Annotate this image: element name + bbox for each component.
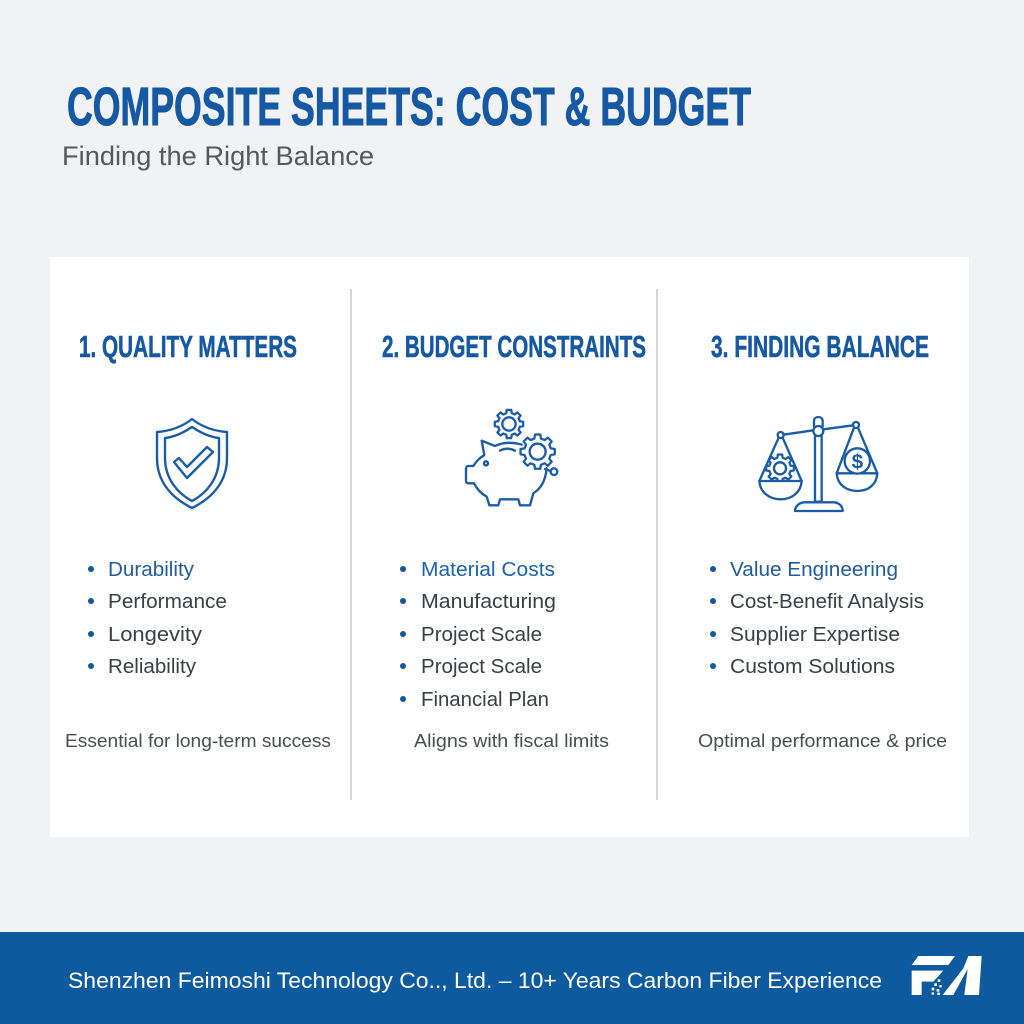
- main white panel: [50, 257, 969, 837]
- column: finding balance: [698, 329, 947, 751]
- caption: budget: Aligns with fiscal limits: [414, 730, 609, 751]
- icon: balance scale with gear and dollar: $: [852, 450, 864, 473]
- heading: budget constraints: 2. BUDGET CONSTRAINTS: [382, 329, 646, 364]
- column: quality matters: [65, 329, 331, 751]
- bullet list: budget: Material Costs: [421, 559, 555, 581]
- bullet list: budget: Financial Plan: [421, 689, 549, 711]
- bullet list: balance: [710, 559, 924, 678]
- caption: balance: Optimal performance & price: [698, 730, 947, 751]
- subtitle: Finding the Right Balance: [62, 141, 374, 171]
- icon: balance scale with gear and dollar: [759, 417, 877, 511]
- bullet list: balance: Supplier Expertise: [730, 624, 900, 646]
- icon: shield with check mark: [157, 419, 227, 508]
- footer band: [0, 932, 1024, 1024]
- caption: quality: Essential for long-term success: [65, 730, 331, 751]
- bullet list: budget: [400, 559, 556, 711]
- heading: finding balance: 3. FINDING BALANCE: [711, 329, 929, 364]
- icon: piggy bank with gears: [466, 410, 557, 505]
- bullet list: quality: Durability: [108, 559, 194, 581]
- logo: FM mark: [912, 956, 982, 995]
- bullet list: budget: Project Scale: [421, 656, 542, 678]
- bullet list: quality: [88, 559, 227, 678]
- bullet list: balance: Custom Solutions: [730, 656, 895, 678]
- bullet list: balance: Value Engineering: [730, 559, 898, 581]
- bullet list: budget: Project Scale: [421, 624, 542, 646]
- bullet list: quality: Reliability: [108, 656, 196, 678]
- column: budget constraints: [382, 329, 646, 751]
- bullet list: quality: Performance: [108, 591, 227, 613]
- heading: quality matters: 1. QUALITY MATTERS: [79, 329, 297, 364]
- bullet list: budget: Manufacturing: [421, 591, 556, 613]
- footer text: Shenzhen Feimoshi Technology Co.., Ltd. – 10+ Years Carbon Fiber Experience: [68, 968, 882, 993]
- bullet list: balance: Cost-Benefit Analysis: [730, 591, 924, 613]
- bullet list: quality: Longevity: [108, 624, 202, 646]
